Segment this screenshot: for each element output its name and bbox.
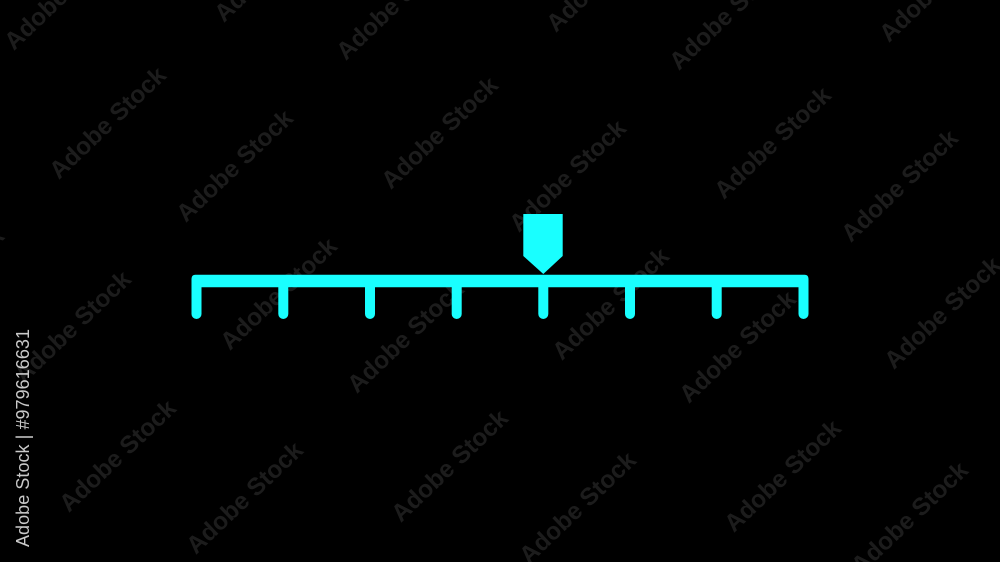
watermark pattern: Adobe Stock <box>674 286 802 408</box>
watermark pattern: Adobe Stock <box>719 415 847 537</box>
watermark pattern: Adobe Stock <box>386 405 514 527</box>
watermark pattern: Adobe Stock <box>836 125 964 247</box>
watermark pattern: Adobe Stock <box>709 82 837 204</box>
watermark pattern: Adobe Stock <box>342 276 470 398</box>
watermark pattern: Adobe Stock <box>215 233 343 355</box>
watermark pattern: Adobe Stock <box>547 243 675 365</box>
ruler horizontal bar <box>192 275 808 314</box>
ruler scale <box>192 275 808 314</box>
watermark pattern: Adobe Stock <box>376 72 504 194</box>
watermark pattern: Adobe Stock <box>44 62 172 184</box>
ruler ticks <box>196 280 804 314</box>
watermark pattern: Adobe Stock <box>9 266 137 388</box>
watermark pattern: Adobe Stock <box>504 115 632 237</box>
watermark pattern: Adobe Stock <box>54 395 182 517</box>
watermark pattern: Adobe Stock <box>181 437 309 559</box>
watermark pattern: Adobe Stock <box>171 105 299 227</box>
pointer marker <box>523 214 563 274</box>
vertical stock id text: Adobe Stock | #979616631 <box>13 329 33 547</box>
